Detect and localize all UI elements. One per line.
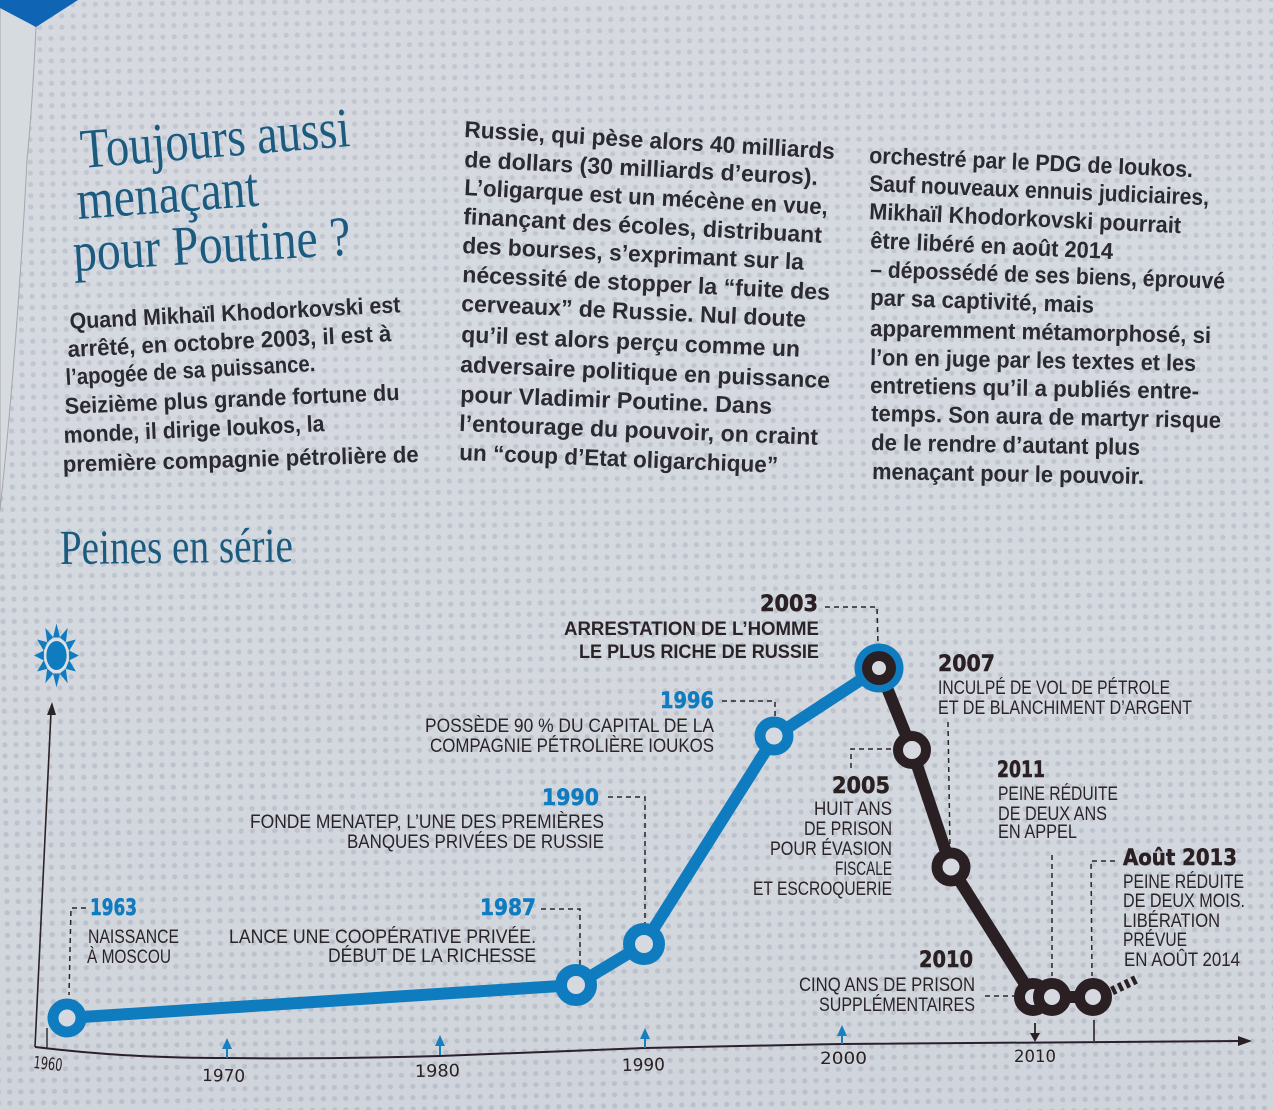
blue page corner [0, 0, 78, 27]
title: Toujours aussi [78, 97, 352, 181]
marker 1996 [760, 722, 788, 750]
label 2011: 2011 [997, 758, 1045, 783]
label 2007: INCULPÉ DE VOL DE PÉTROLE [938, 678, 1170, 699]
text column 2: Russie, qui pèse alors 40 milliards [464, 116, 836, 164]
vertical axis [35, 702, 56, 1047]
label 1987: 1987 [480, 896, 536, 921]
text column 2: l’entourage du pouvoir, on craint [459, 410, 819, 450]
text column 2: pour Vladimir Poutine. Dans [460, 381, 773, 419]
text column 3: entretiens qu’il a publiés entre- [870, 372, 1199, 404]
label 2003: 2003 [760, 592, 818, 617]
label août 2013 [1123, 846, 1245, 971]
text column 1: arrêté, en octobre 2003, il est à [67, 320, 392, 362]
text column 1: l’apogée de sa puissance. [65, 350, 316, 390]
label 1990 [250, 786, 604, 853]
label 2003: ARRESTATION DE L’HOMME [564, 619, 819, 640]
marker 2010 [1020, 984, 1046, 1010]
dashed leader lines [69, 607, 1115, 996]
axis year labels: 1990 [622, 1055, 665, 1076]
text column 3 [869, 142, 1226, 489]
label 1990: FONDE MENATEP, L’UNE DES PREMIÈRES [250, 812, 604, 833]
label 1963: NAISSANCE [88, 927, 179, 948]
text column 1: Seizième plus grande fortune du [64, 379, 400, 419]
text column 1: Quand Mikhaïl Khodorkovski est [69, 291, 401, 334]
axis year labels: 1980 [415, 1061, 460, 1082]
label 2005: ET ESCROQUERIE [753, 879, 892, 900]
label 2010: SUPPLÉMENTAIRES [819, 995, 975, 1016]
label 1987: DÉBUT DE LA RICHESSE [328, 946, 536, 967]
text column 3: être libéré en août 2014 [870, 227, 1114, 264]
label 2010: 2010 [919, 948, 973, 973]
label 2005: DE PRISON [804, 819, 892, 840]
text column 3: temps. Son aura de martyr risque [871, 400, 1221, 433]
text column 3: de le rendre d’autant plus [871, 429, 1140, 460]
text column 1: monde, il dirige Ioukos, la [63, 410, 325, 448]
left page strip [0, 0, 36, 510]
text column 2: qu’il est alors perçu comme un [461, 321, 801, 362]
marker 1990 [629, 929, 659, 959]
text column 3: orchestré par le PDG de Ioukos. [869, 142, 1194, 182]
label 2005: POUR ÉVASION [770, 839, 892, 860]
label 2005: FISCALE [835, 859, 892, 880]
label 1996: POSSÈDE 90 % DU CAPITAL DE LA [425, 716, 714, 737]
label août 2013: Août 2013 [1123, 846, 1237, 871]
label 1996: COMPAGNIE PÉTROLIÈRE IOUKOS [430, 736, 714, 757]
text column 3: menaçant pour le pouvoir. [872, 458, 1144, 489]
label 2007: 2007 [938, 652, 995, 677]
title [71, 97, 352, 284]
label août 2013: PEINE RÉDUITE [1123, 872, 1244, 893]
label 2005: HUIT ANS [814, 799, 892, 820]
axis year labels: 2010 [1014, 1047, 1056, 1067]
label août 2013: PRÉVUE [1123, 930, 1187, 951]
horizontal axis [35, 1020, 1252, 1058]
marker 1963 [53, 1004, 81, 1032]
label 2011: PEINE RÉDUITE [998, 784, 1118, 805]
text column 3: apparemment métamorphosé, si [870, 315, 1211, 348]
marker 1987 [561, 970, 591, 1000]
blue line: rise 1963-2003 [67, 668, 879, 1018]
text column 2: un “coup d’Etat oligarchique” [459, 439, 779, 478]
text column 2: nécessité de stopper la “fuite des [462, 261, 831, 305]
title: menaçant [74, 157, 261, 232]
label 1963: À MOSCOU [87, 947, 171, 968]
marker 2003 [854, 644, 904, 692]
text column 2: des bourses, s’exprimant sur la [462, 232, 805, 275]
label 2005: 2005 [832, 774, 890, 799]
axis tick arrows [222, 1025, 847, 1058]
label août 2013: DE DEUX MOIS. [1123, 891, 1245, 912]
label 2007: ET DE BLANCHIMENT D’ARGENT [938, 698, 1192, 719]
label 2011 [997, 758, 1118, 843]
timeline chart [32, 592, 1252, 1087]
label 2003 [564, 592, 819, 663]
label 2010: CINQ ANS DE PRISON [799, 975, 975, 996]
label 1996: 1996 [660, 689, 714, 714]
marker 2007 [937, 853, 965, 881]
label 2010 [799, 948, 975, 1016]
axis year labels: 1970 [202, 1066, 245, 1087]
text column 1: première compagnie pétrolière de [62, 441, 419, 477]
marker 2013 [1080, 984, 1106, 1010]
label 1987: LANCE UNE COOPÉRATIVE PRIVÉE. [229, 927, 536, 948]
axis year labels: 1960 [32, 1053, 63, 1076]
axis year labels: 2000 [820, 1049, 867, 1069]
label août 2013: EN AOÛT 2014 [1124, 949, 1240, 971]
marker 2005 [898, 736, 926, 764]
text column 2: cerveaux” de Russie. Nul doute [461, 290, 807, 332]
label 1996 [425, 689, 714, 757]
label 2005 [753, 774, 892, 900]
icon: sun [34, 624, 79, 688]
axis year labels [32, 1047, 1056, 1087]
text column 2: L’oligarque est un mécène en vue, [464, 174, 829, 220]
label 2007 [938, 652, 1192, 719]
label 1990: 1990 [542, 786, 599, 811]
text column 3: Sauf nouveaux ennuis judiciaires, [869, 170, 1210, 210]
dark line: fall 2003-2013 [879, 668, 1093, 997]
text column 3: par sa captivité, mais [870, 284, 1095, 318]
text column 2 [459, 116, 836, 478]
dashed continuation [1112, 978, 1139, 991]
text column 3: Mikhaïl Khodorkovski pourrait [869, 198, 1182, 238]
label 1963 [87, 896, 179, 968]
label 1963: 1963 [90, 896, 137, 921]
label 2011: EN APPEL [998, 822, 1077, 843]
text column 2: finançant des écoles, distribuant [463, 203, 823, 248]
label 2011: DE DEUX ANS [998, 804, 1107, 825]
chart heading: Peines en série [60, 518, 293, 575]
text column 2: de dollars (30 milliards d’euros). [464, 146, 819, 190]
text column 3: l’on en juge par les textes et les [870, 344, 1196, 376]
text column 2: adversaire politique en puissance [460, 351, 831, 393]
marker 2011 [1038, 984, 1066, 1010]
label 1987 [229, 896, 536, 967]
label août 2013: LIBÉRATION [1123, 911, 1220, 932]
title: pour Poutine ? [71, 206, 352, 284]
label 1990: BANQUES PRIVÉES DE RUSSIE [347, 832, 604, 853]
text column 3: – dépossédé de ses biens, éprouvé [870, 256, 1226, 294]
label 2003: LE PLUS RICHE DE RUSSIE [579, 642, 819, 663]
text column 1 [62, 291, 419, 477]
